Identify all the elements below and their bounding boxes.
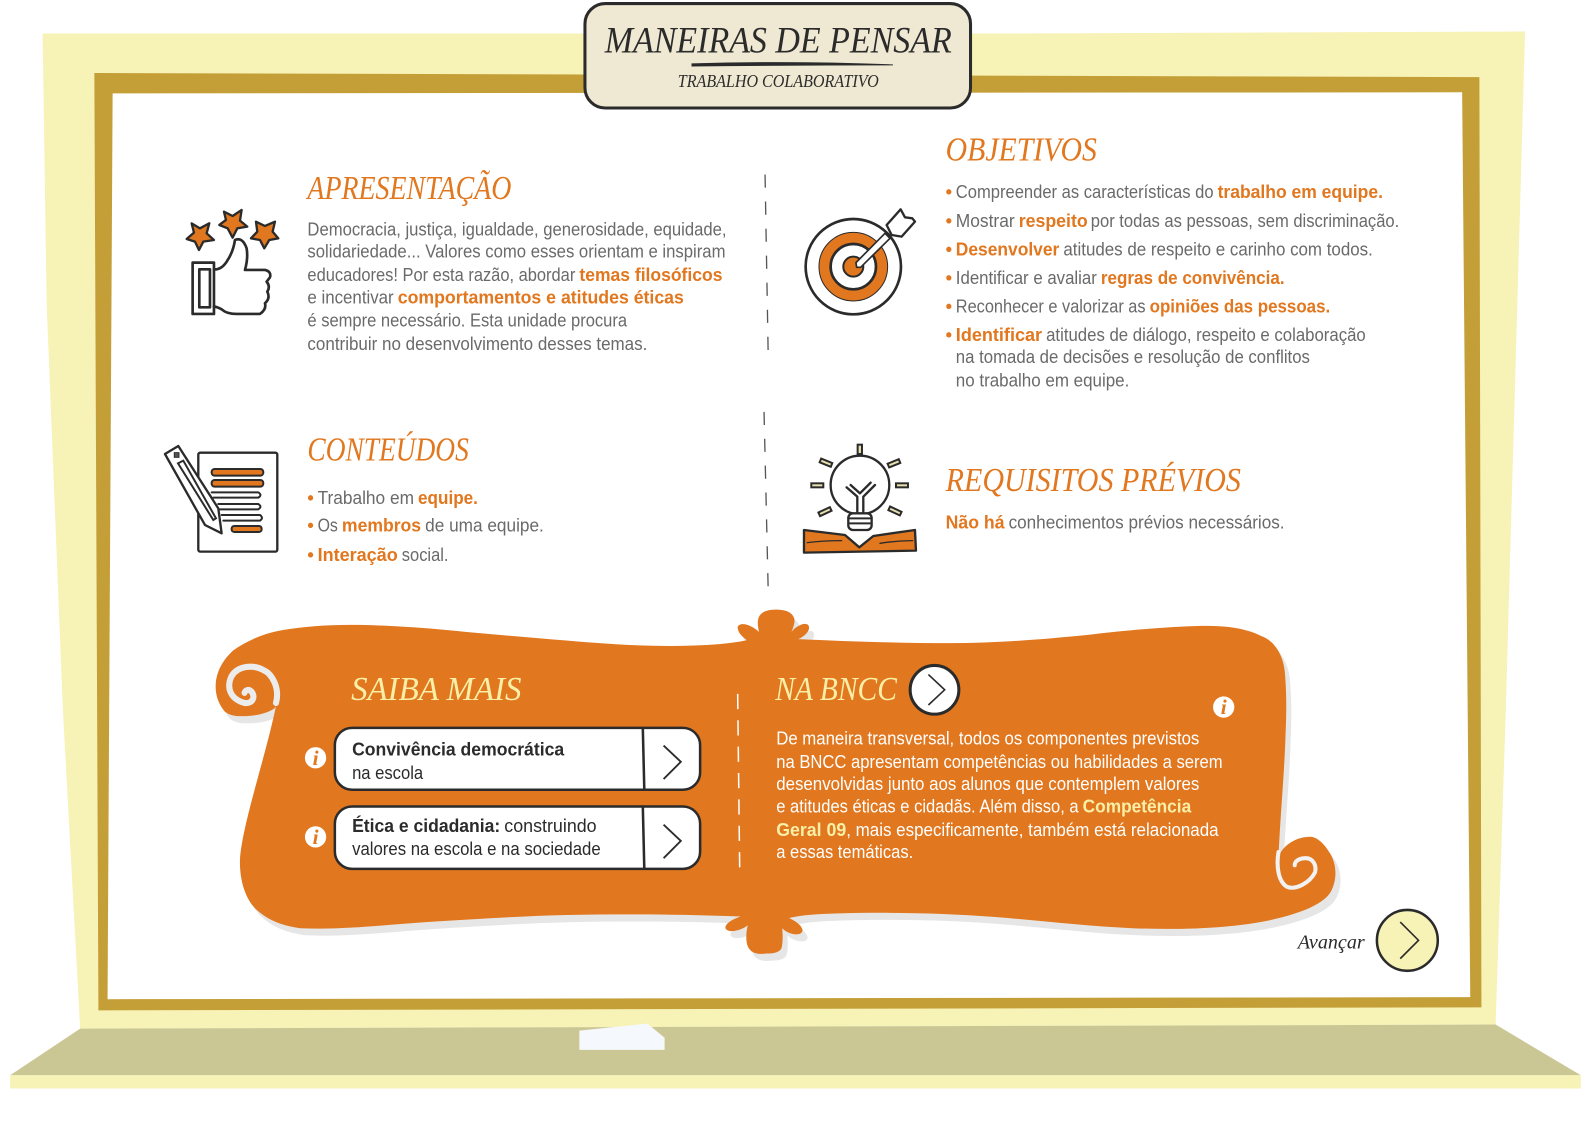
list	[307, 487, 544, 565]
icon: light bulb over book	[804, 445, 916, 553]
panel: requisitos prévios	[804, 445, 1285, 553]
link button: ética e cidadania	[335, 805, 700, 869]
panel: conteúdos	[165, 431, 544, 565]
list: social.	[402, 544, 448, 565]
list: Mostrar	[956, 210, 1015, 231]
link button: ética e cidadania: construindo	[504, 815, 597, 836]
list: •	[946, 295, 952, 316]
list: •	[946, 324, 952, 345]
list: opiniões das pessoas.	[1150, 295, 1330, 316]
divider: lower	[764, 412, 768, 586]
text block: temas filosóficos	[579, 264, 722, 285]
icon: target with arrow	[806, 209, 915, 314]
list: na tomada de decisões e resolução de conflitos	[956, 346, 1310, 367]
list: •	[946, 239, 952, 260]
text block	[307, 218, 727, 354]
list: atitudes de respeito e carinho com todos.	[1063, 239, 1373, 260]
list: Os	[318, 515, 338, 536]
heading: APRESENTAÇÃO	[306, 170, 511, 207]
desk shelf	[10, 1025, 1581, 1088]
list: Identificar e avaliar	[956, 267, 1097, 288]
list: por todas as pessoas, sem discriminação.	[1091, 210, 1399, 231]
list: •	[946, 210, 952, 231]
list: no trabalho em equipe.	[956, 369, 1129, 390]
panel: orange scroll	[216, 610, 1341, 961]
panel: objetivos	[806, 131, 1399, 390]
text block: e incentivar	[307, 286, 394, 307]
list: •	[307, 544, 314, 565]
list: •	[307, 515, 314, 536]
link button: convivência democrática: na escola	[352, 762, 424, 783]
link button: ética e cidadania: Ética e cidadania:	[352, 815, 500, 836]
link button: convivência democrática	[335, 727, 700, 790]
list: Trabalho em	[318, 487, 414, 508]
text block: na bncc: Geral 09	[776, 819, 846, 840]
heading: saiba mais: SAIBA MAIS	[351, 671, 522, 708]
button: na bncc arrow	[910, 665, 959, 714]
text block: educadores! Por esta razão, abordar	[307, 264, 575, 285]
divider: upper	[765, 174, 768, 350]
text block: contribuir no desenvolvimento desses temas.	[307, 333, 647, 354]
subtitle: TRABALHO COLABORATIVO	[678, 71, 879, 91]
text block: Democracia, justiça, igualdade, generosidade, equidade,	[307, 218, 727, 239]
text block: na bncc: Competência	[1083, 796, 1192, 817]
icon: document and pencil	[165, 446, 277, 552]
heading: na bncc: NA BNCC	[774, 671, 898, 708]
text block: conhecimentos prévios necessários.	[1009, 512, 1285, 533]
list: equipe.	[418, 487, 478, 508]
icon: info 1: i	[313, 746, 319, 770]
text block: na bncc	[776, 728, 1223, 862]
heading: CONTEÚDOS	[307, 431, 469, 469]
button: avançar	[1377, 910, 1438, 971]
link button: convivência democrática: Convivência democrática	[352, 739, 565, 760]
icon: info 3	[1213, 695, 1234, 719]
text block: solidariedade... Valores como esses orientam e inspiram	[307, 241, 725, 262]
text block: na bncc: e atitudes éticas e cidadãs. Além disso, a	[776, 796, 1079, 817]
title: MANEIRAS DE PENSAR	[604, 21, 952, 62]
list: •	[307, 487, 314, 508]
list	[946, 181, 1399, 390]
list: Desenvolver	[956, 239, 1059, 260]
list: Identificar	[956, 324, 1042, 345]
text block: comportamentos e atitudes éticas	[398, 286, 684, 307]
text block: na bncc: De maneira transversal, todos os componentes previstos	[776, 728, 1199, 749]
list: Interação	[318, 544, 398, 565]
icon: thumbs up with stars	[187, 210, 278, 314]
title plate	[585, 4, 971, 108]
chalk piece	[579, 1024, 665, 1050]
link button: ética e cidadania: valores na escola e na sociedade	[352, 838, 601, 859]
text block: na bncc: desenvolvidas junto aos alunos que contemplem valores	[776, 773, 1199, 794]
list: regras de convivência.	[1101, 267, 1285, 288]
list: trabalho em equipe.	[1218, 181, 1383, 202]
icon: info 2	[305, 825, 326, 849]
list: de uma equipe.	[425, 515, 544, 536]
list: Compreender as características do	[956, 181, 1214, 202]
list: Reconhecer e valorizar as	[956, 295, 1146, 316]
list: •	[946, 267, 952, 288]
list: •	[946, 181, 952, 202]
panel: apresentação	[187, 170, 727, 354]
heading: REQUISITOS PRÉVIOS	[945, 462, 1241, 499]
icon: info 3: i	[1221, 695, 1227, 719]
heading: OBJETIVOS	[946, 131, 1097, 168]
icon: info 1	[305, 746, 326, 770]
text block: na bncc: a essas temáticas.	[776, 841, 913, 862]
icon: info 2: i	[313, 825, 319, 849]
label: avançar: Avançar	[1296, 931, 1365, 953]
list: atitudes de diálogo, respeito e colaboração	[1046, 324, 1366, 345]
text block: na bncc: na BNCC apresentam competências ou habilidades a serem	[776, 751, 1223, 772]
list: membros	[342, 515, 421, 536]
text block: na bncc: , mais especificamente, também está relacionada	[846, 819, 1219, 840]
text block: é sempre necessário. Esta unidade procura	[307, 310, 628, 331]
text block: Não há	[946, 512, 1005, 533]
list: respeito	[1019, 210, 1088, 231]
